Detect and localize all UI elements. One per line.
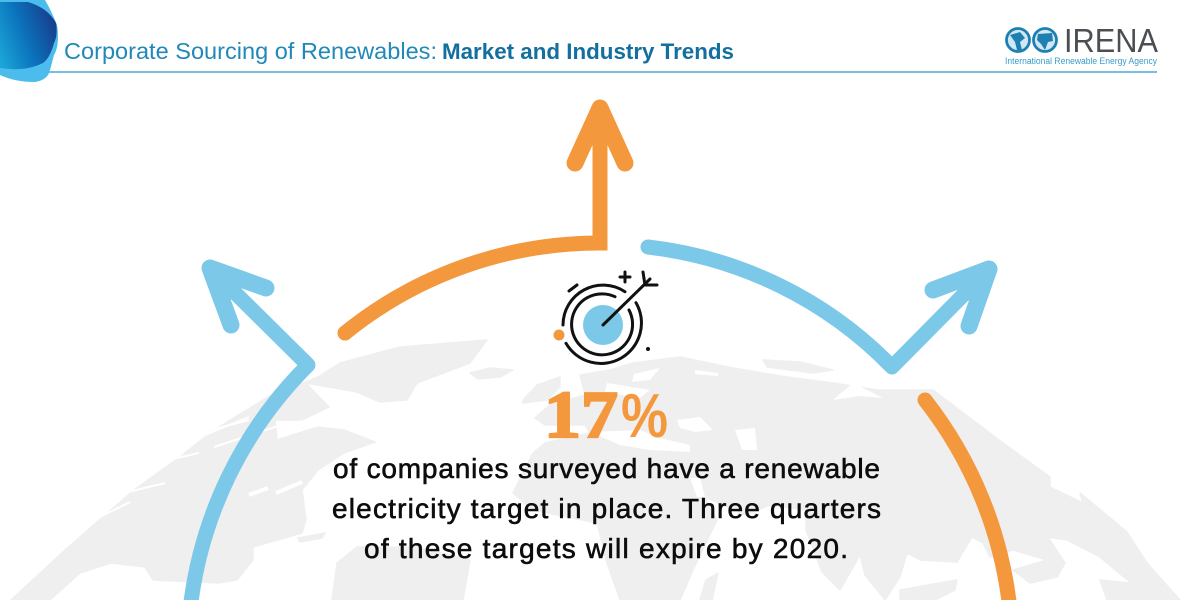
IRENA logo [1005,22,1158,66]
arc arrow: right blue [648,247,989,367]
big number: 17 [544,378,618,452]
world map background [11,340,1180,600]
statement text: of companies surveyed have a renewable [333,453,880,484]
arc arrow: top orange [345,108,625,333]
logo blob [0,0,58,82]
big number: % [621,382,668,451]
title: Corporate Sourcing of Renewables: [64,38,437,64]
title [64,38,734,64]
IRENA logo: IRENA [1064,22,1158,59]
header line [45,71,1157,73]
big number [544,378,668,452]
statement text: of these targets will expire by 2020. [364,533,848,564]
statement text: electricity target in place. Three quarters [332,493,881,524]
icon: target with arrow [554,272,657,363]
map seas and gaps [590,368,883,497]
arc arrow: left blue [190,268,308,600]
title: Market and Industry Trends [442,39,734,64]
arc: right orange [925,400,1010,600]
IRENA logo: International Renewable Energy Agency [1005,56,1157,66]
statement text [332,453,881,564]
